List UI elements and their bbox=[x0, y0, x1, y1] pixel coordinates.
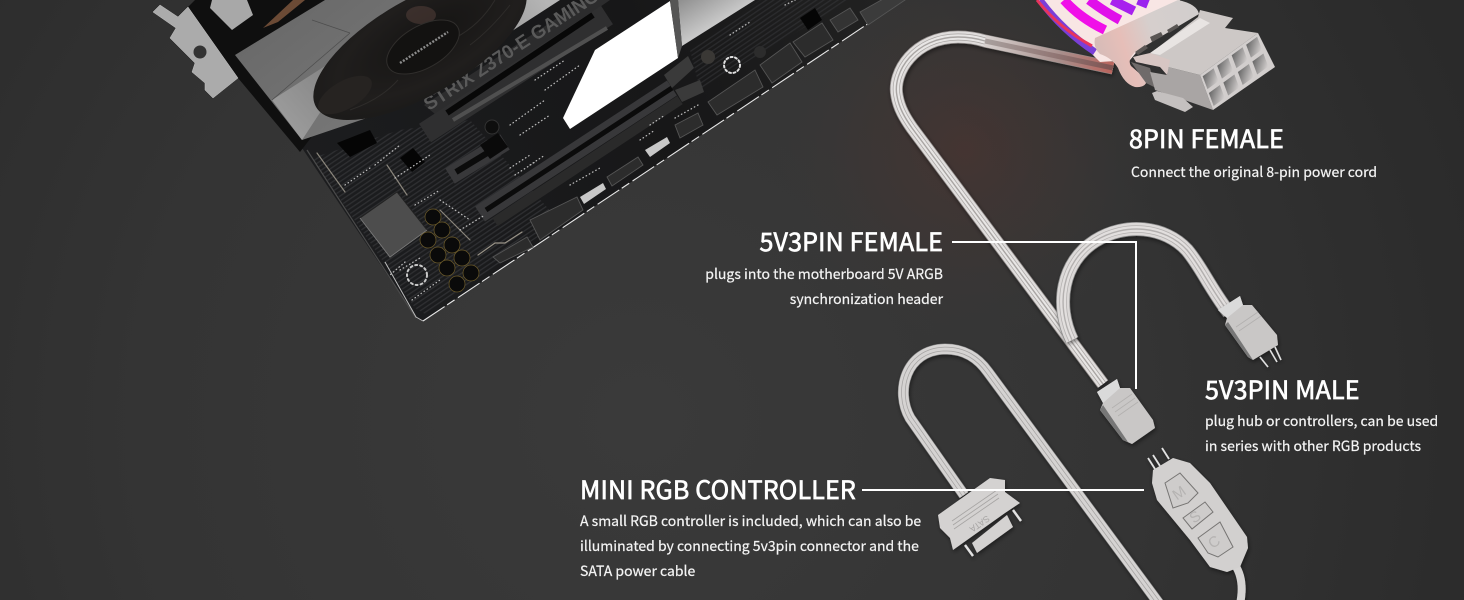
gpu dark backing bbox=[188, 0, 340, 152]
gpu fan bbox=[292, 0, 548, 149]
5V3 pin cable bbox=[1063, 229, 1229, 340]
description: SATA power cable bbox=[580, 561, 695, 581]
description: illuminated by connecting 5v3pin connector and the bbox=[580, 536, 919, 556]
silver heatsink bbox=[678, 0, 755, 46]
label: 5V3PIN MALE bbox=[1205, 371, 1438, 456]
5V3 pin male connector bbox=[1218, 296, 1281, 367]
board headers bbox=[493, 0, 905, 263]
leader line: 5V3PIN FEMALE bbox=[952, 242, 1136, 389]
heading: 5V3PIN MALE bbox=[1205, 371, 1360, 407]
description: Connect the original 8-pin power cord bbox=[1131, 162, 1377, 182]
rgb ribbon bbox=[1037, 0, 1180, 62]
sata label: SATA bbox=[968, 513, 992, 534]
description bbox=[1205, 411, 1438, 456]
button letters: S bbox=[1186, 507, 1204, 527]
description: plug hub or controllers, can be used bbox=[1205, 411, 1438, 431]
connector top bbox=[1148, 10, 1258, 75]
traces and dots bbox=[317, 0, 805, 300]
motherboard bbox=[300, 0, 905, 321]
description bbox=[580, 511, 921, 581]
collar gap bbox=[1131, 62, 1156, 88]
capacitors bbox=[420, 209, 479, 292]
description: plugs into the motherboard 5V ARGB bbox=[705, 264, 943, 284]
SATA loop cable bbox=[903, 349, 1160, 600]
gray chipset block bbox=[360, 192, 427, 257]
label: 5V3PIN FEMALE bbox=[705, 223, 944, 309]
5V3 pin female connector bbox=[1097, 379, 1155, 444]
white cover plate bbox=[563, 1, 678, 129]
description: A small RGB controller is included, which can also be bbox=[580, 511, 921, 531]
bracket bbox=[153, 5, 238, 98]
label: 8PIN FEMALE bbox=[1129, 120, 1377, 182]
mini RGB controller bbox=[1148, 448, 1248, 600]
description: in series with other RGB products bbox=[1205, 436, 1421, 456]
collar bbox=[1095, 0, 1199, 87]
board name strip bbox=[424, 0, 610, 118]
heading: 8PIN FEMALE bbox=[1129, 120, 1284, 156]
description: synchronization header bbox=[790, 289, 943, 309]
collar slots bbox=[1135, 24, 1179, 55]
button letters bbox=[1169, 483, 1224, 552]
button letters: M bbox=[1169, 483, 1189, 504]
dark logo plate bbox=[664, 56, 704, 102]
controller buttons bbox=[1165, 473, 1233, 557]
leader line: mini RGB controller bbox=[862, 489, 1144, 491]
side latch bbox=[1133, 53, 1170, 75]
button letters: C bbox=[1205, 532, 1224, 552]
main 8-pin cable bbox=[896, 37, 1113, 384]
8-pin female connector bbox=[1037, 0, 1275, 112]
black chips bbox=[400, 148, 425, 172]
connector side bbox=[1150, 67, 1213, 110]
graphics card and motherboard bbox=[153, 0, 905, 321]
heading: 5V3PIN FEMALE bbox=[760, 223, 943, 259]
description bbox=[705, 264, 944, 309]
silver gpu panel bbox=[455, 0, 560, 68]
connector face bbox=[1200, 33, 1275, 110]
heading: MINI RGB CONTROLLER bbox=[580, 471, 856, 507]
gpu shroud bbox=[235, 0, 420, 140]
lower latch bbox=[1152, 91, 1193, 112]
PCIe slots bbox=[425, 15, 680, 222]
pin holes bbox=[1203, 37, 1268, 106]
SATA connector bbox=[938, 478, 1021, 556]
label: MINI RGB CONTROLLER bbox=[580, 471, 921, 581]
